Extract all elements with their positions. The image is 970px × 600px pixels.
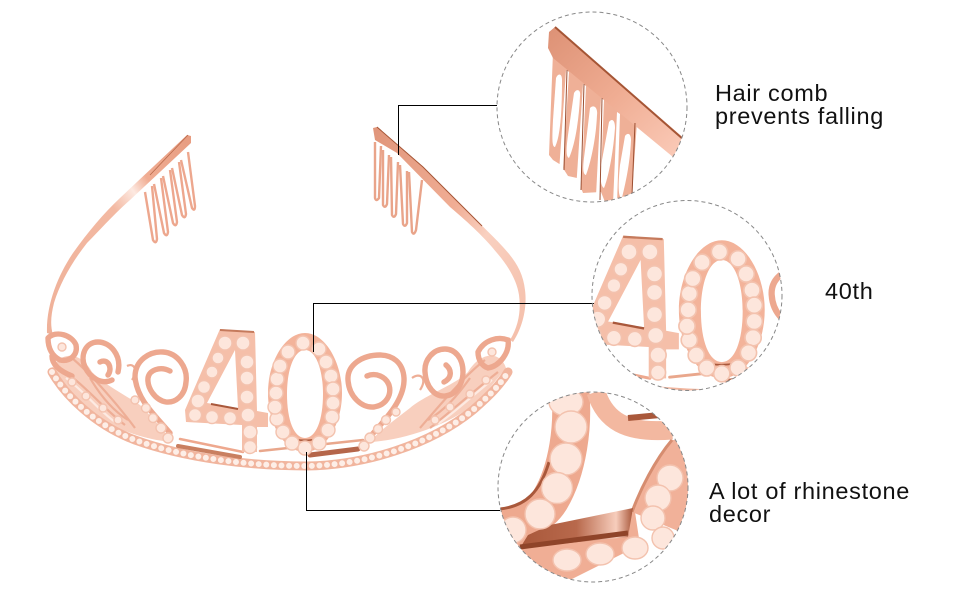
right headband arm <box>373 127 526 342</box>
scroll stems with stones <box>58 343 496 451</box>
label: rhinestone decor <box>709 478 910 527</box>
rhinestone crown <box>48 329 508 466</box>
right scrolls <box>348 338 508 440</box>
label: hair comb <box>715 80 884 129</box>
left hair comb <box>145 152 195 242</box>
detail circle: hair comb <box>497 12 687 204</box>
number 0 <box>268 333 342 455</box>
label: hair comb: prevents falling <box>715 103 884 129</box>
label: 40th: 40th <box>825 278 873 304</box>
crown base band with stones <box>52 372 508 466</box>
detail circle: rhinestones <box>498 392 688 582</box>
crown filigree <box>52 356 506 442</box>
detail circle: 40 <box>592 200 782 391</box>
leader line: comb <box>398 106 497 155</box>
left scrolls <box>48 334 186 433</box>
label: rhinestone decor: decor <box>709 501 771 527</box>
label: rhinestone decor: A lot of rhinestone <box>709 478 910 504</box>
left headband arm <box>47 135 191 335</box>
leader line: rhinestones <box>306 452 500 510</box>
number 4 <box>185 329 268 454</box>
label: hair comb: Hair comb <box>715 80 828 106</box>
leader line: 40 <box>314 304 594 352</box>
right hair comb <box>375 142 422 234</box>
tiara illustration and callouts <box>45 12 782 582</box>
